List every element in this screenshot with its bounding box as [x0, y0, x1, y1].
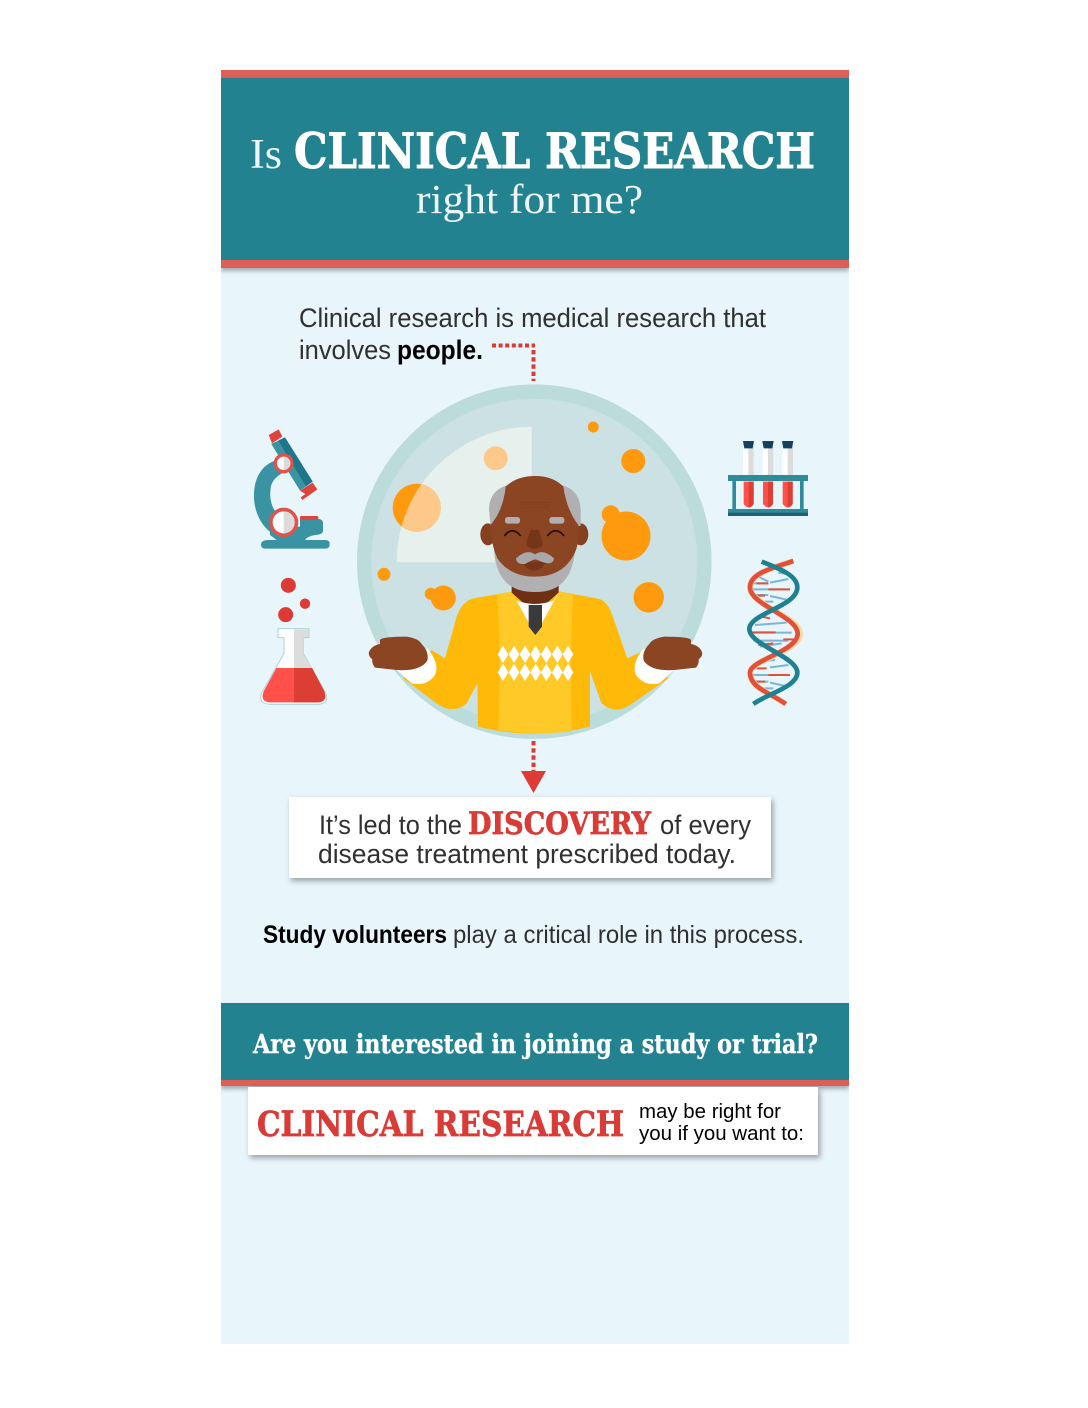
callout: discovery: disease treatment prescribed today.: [318, 839, 736, 869]
red strand: [750, 561, 798, 704]
mouth: [523, 562, 546, 571]
title: Is: [250, 132, 282, 178]
title: [250, 122, 815, 222]
scientist: [369, 476, 702, 734]
intro text: involves: [299, 335, 391, 365]
halo: [750, 561, 800, 704]
icon: DNA helix: [749, 561, 800, 704]
title: right for me?: [416, 176, 643, 222]
icon: flask with bubbles: [261, 578, 327, 704]
callout: clinical research may be right: [248, 1087, 818, 1155]
text: study volunteers: play a critical role in this process.: [453, 921, 804, 949]
ears: [480, 523, 588, 545]
right cuff and hand: [635, 637, 702, 684]
intro text: Clinical research is medical research that: [299, 303, 766, 333]
callout: clinical research may be right: CLINICAL RESEARCH: [257, 1104, 624, 1145]
eyebrows: [505, 517, 564, 524]
arrow: dotted arrow to discovery box: [521, 741, 546, 793]
orange bacteria: [378, 422, 664, 612]
icon: microscope: [254, 429, 330, 549]
forehead lines: [519, 502, 551, 508]
panel: header banner: [221, 70, 849, 268]
text: study volunteers: [263, 921, 804, 949]
nose: [527, 530, 543, 549]
moustache: [516, 552, 554, 564]
neck: [512, 580, 559, 613]
callout: discovery: It’s led to the: [319, 810, 462, 840]
panel: light blue background: [221, 268, 849, 1344]
banner: question: [221, 1003, 849, 1086]
collar: [512, 592, 559, 635]
banner: question: Are you interested in joining a study or trial?: [252, 1030, 818, 1060]
sweater vest: [497, 592, 573, 733]
callout: discovery: [289, 797, 771, 878]
callout: clinical research may be right: you if you want to:: [639, 1123, 804, 1145]
left cuff and hand: [369, 637, 436, 684]
title: CLINICAL RESEARCH: [294, 122, 815, 180]
hair: [489, 485, 581, 526]
callout: discovery: of every: [660, 810, 751, 840]
sweater: [403, 592, 668, 734]
intro text: people.: [397, 335, 483, 365]
petri dish: [357, 384, 712, 739]
tie: [529, 605, 542, 635]
intro text: [299, 303, 766, 365]
callout: discovery: DISCOVERY: [468, 806, 652, 842]
text: study volunteers: Study volunteers: [263, 921, 447, 949]
callout: clinical research may be right: may be right for: [639, 1101, 781, 1123]
icon: test tube rack: [728, 441, 808, 516]
arrow: dotted connector from text to circle: [492, 346, 535, 381]
teal strand: [749, 562, 797, 704]
illustration: petri dish with scientist: [357, 384, 712, 739]
rungs: [752, 573, 793, 688]
diamond pattern: [498, 646, 573, 681]
face: [491, 476, 579, 577]
infographic page: [221, 70, 849, 1344]
eyes: [504, 531, 564, 536]
beard: [494, 550, 575, 592]
